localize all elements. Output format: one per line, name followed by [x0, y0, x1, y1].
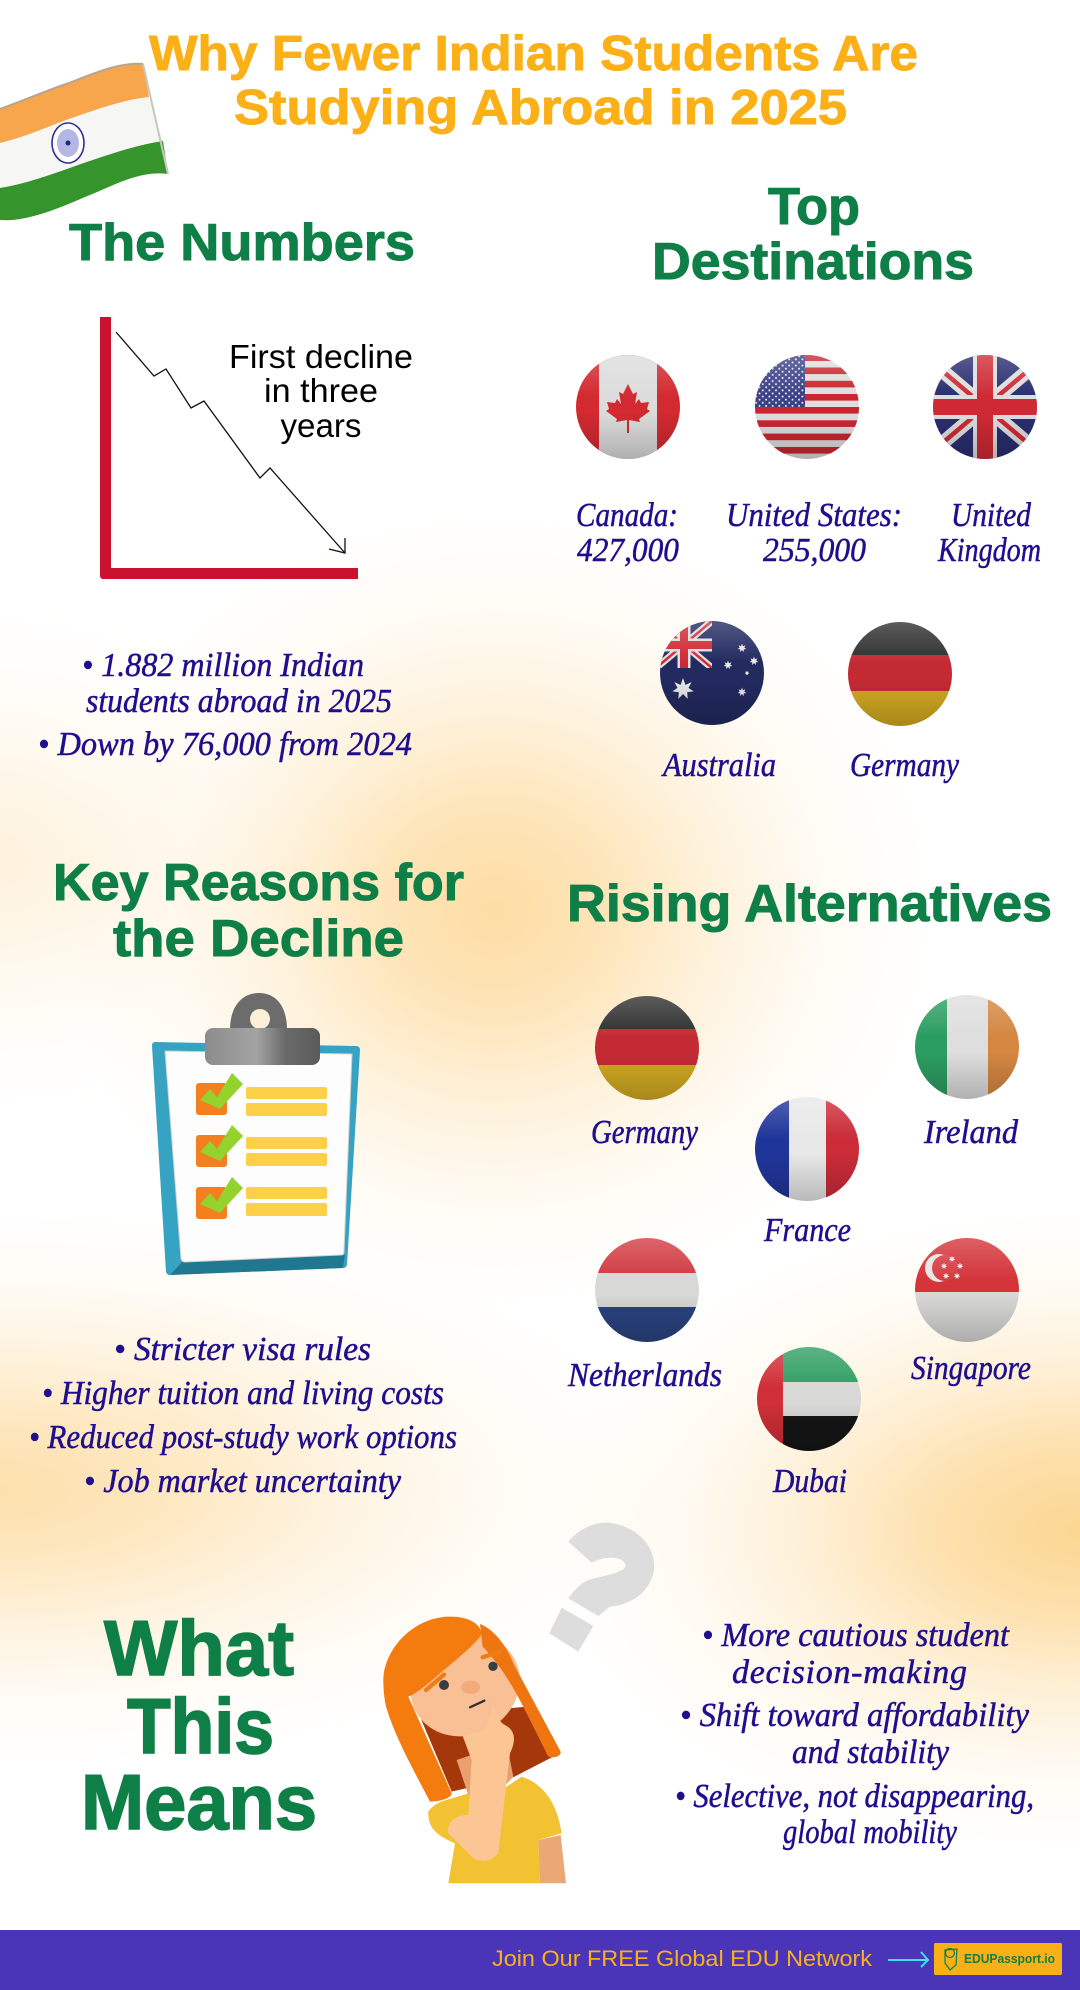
icon: Ireland flag — [915, 995, 1019, 1099]
labels: top destinations row one: Canada: — [576, 497, 678, 534]
icon: India flag — [0, 64, 168, 220]
chart: declining line — [100, 317, 358, 579]
text block: what this means bullets: decision-making — [732, 1654, 967, 1691]
heading: Top Destinations: Destinations — [652, 233, 974, 291]
text block: numbers bullets: students abroad in 2025 — [86, 683, 392, 720]
text block: what this means bullets: global mobility — [783, 1814, 958, 1851]
icon: Germany flag — [848, 622, 952, 726]
labels: top destinations row one — [576, 497, 1041, 569]
labels: rising alternatives: Ireland — [923, 1114, 1019, 1151]
text block: what this means bullets: • Selective, not disappearing, — [675, 1778, 1034, 1815]
text block: key reasons bullets — [29, 1331, 457, 1500]
icon: Canada flag — [576, 355, 680, 459]
text block: key reasons bullets: • Job market uncertainty — [84, 1463, 402, 1500]
labels: rising alternatives: Dubai — [772, 1463, 847, 1500]
text block: numbers bullets: • Down by 76,000 from 2024 — [38, 726, 412, 763]
labels: rising alternatives: Singapore — [911, 1350, 1031, 1387]
text block: what this means bullets: and stability — [792, 1734, 950, 1771]
title: Why Fewer Indian Students Are — [149, 27, 918, 81]
illustration: thinking girl — [383, 1615, 566, 1883]
labels: rising alternatives — [567, 1114, 1031, 1500]
labels: top destinations row one: 427,000 — [577, 532, 679, 569]
labels: top destinations row two: Germany — [850, 747, 960, 784]
heading: Top Destinations — [652, 178, 974, 291]
text block: what this means bullets: • More cautious student — [702, 1617, 1010, 1654]
heading: What This Means — [81, 1604, 317, 1846]
chart annotation: years — [280, 407, 362, 444]
heading: Key Reasons for the Decline: the Decline — [113, 910, 404, 968]
heading: What This Means: What — [104, 1604, 294, 1692]
text block: key reasons bullets: • Higher tuition and living costs — [42, 1375, 444, 1412]
title — [149, 27, 918, 135]
text block: numbers bullets: • 1.882 million Indian — [82, 647, 364, 684]
labels: top destinations row one: United States: — [726, 497, 902, 534]
footer call to action: Join Our FREE Global EDU Network — [492, 1946, 873, 1971]
labels: rising alternatives: Netherlands — [567, 1357, 722, 1394]
logo badge — [934, 1943, 1062, 1975]
icon: Netherlands flag — [595, 1238, 699, 1342]
text block: what this means bullets — [675, 1617, 1034, 1851]
icon: Germany flag — [595, 996, 699, 1100]
icon: Australia flag — [656, 621, 764, 725]
icon: USA flag — [755, 355, 859, 459]
footer bar — [0, 1930, 1080, 1990]
icon: UAE flag — [757, 1347, 861, 1451]
heading: Key Reasons for the Decline — [53, 854, 464, 968]
logo badge: EDUPassport.io — [964, 1951, 1055, 1966]
labels: top destinations row one: Kingdom — [937, 532, 1041, 569]
chart annotation — [229, 338, 413, 444]
labels: rising alternatives: Germany — [591, 1114, 699, 1151]
icon: clipboard — [152, 993, 360, 1275]
heading: Top Destinations: Top — [768, 178, 860, 236]
icon: question mark — [549, 1523, 654, 1652]
heading: What This Means: This — [127, 1682, 274, 1770]
chart annotation: in three — [264, 372, 378, 409]
icon: UK flag — [933, 355, 1037, 459]
text block: key reasons bullets: • Reduced post-study work options — [29, 1419, 457, 1456]
labels: rising alternatives: France — [763, 1212, 851, 1249]
labels: top destinations row two — [661, 747, 960, 784]
heading: The Numbers: The Numbers — [69, 214, 415, 272]
labels: top destinations row two: Australia — [661, 747, 776, 784]
heading: Key Reasons for the Decline: Key Reasons for — [53, 854, 464, 912]
labels: top destinations row one: United — [951, 497, 1032, 534]
labels: top destinations row one: 255,000 — [763, 532, 866, 569]
text block: numbers bullets — [38, 647, 412, 763]
title: Studying Abroad in 2025 — [234, 81, 847, 135]
arrow — [888, 1952, 928, 1967]
text block: key reasons bullets: • Stricter visa rules — [114, 1331, 371, 1368]
icon: Singapore flag — [915, 1238, 1019, 1342]
chart annotation: First decline — [229, 338, 413, 375]
heading: Rising Alternatives: Rising Alternatives — [567, 875, 1052, 933]
icon: France flag — [755, 1097, 859, 1201]
heading: What This Means: Means — [81, 1758, 317, 1846]
text block: what this means bullets: • Shift toward affordability — [680, 1697, 1030, 1734]
